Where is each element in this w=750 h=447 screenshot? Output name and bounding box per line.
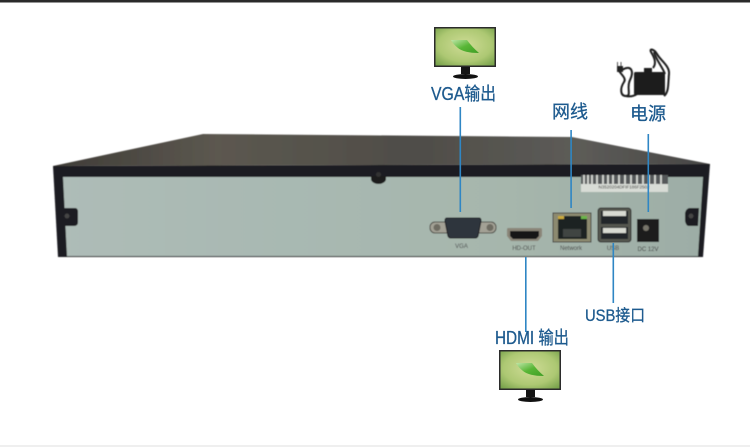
leader line: VGA (460, 107, 461, 212)
device rear frame (53, 164, 710, 257)
label: HDMI output: HDMI 输出 (495, 328, 569, 348)
device top face (53, 134, 710, 166)
screw: left (64, 208, 78, 226)
leader line: power (648, 134, 649, 212)
rear panel (63, 177, 703, 256)
leader line: USB (612, 243, 614, 303)
icon: VGA monitor (434, 27, 496, 79)
bottom grey border (0, 445, 750, 447)
network port (553, 213, 591, 252)
NVR device rear view (53, 134, 710, 257)
label: network cable: 网线 (552, 102, 588, 122)
leader line: HDMI (525, 257, 527, 332)
VGA port (430, 218, 496, 250)
label: power: 电源 (630, 104, 666, 124)
DC power port (637, 219, 659, 253)
screw: right (685, 208, 699, 226)
HDMI port (507, 228, 542, 252)
HD-OUT label: HD-OUT (512, 246, 536, 252)
barcode label (581, 175, 668, 192)
icon: HDMI monitor (499, 350, 561, 402)
Network label: Network (560, 246, 583, 252)
DC 12V label: DC 12V (637, 247, 659, 253)
USB port (598, 208, 631, 252)
icon: power adapter (617, 50, 669, 96)
barcode label: N3520204DFIF186F2502 (598, 184, 650, 190)
label: VGA output: VGA输出 (431, 84, 496, 104)
label: USB port: USB接口 (585, 306, 645, 325)
screw: top (371, 172, 386, 184)
leader line: network (570, 130, 572, 208)
USB label: USB (607, 246, 619, 252)
top black border (0, 0, 750, 2)
VGA label: VGA (455, 244, 468, 250)
